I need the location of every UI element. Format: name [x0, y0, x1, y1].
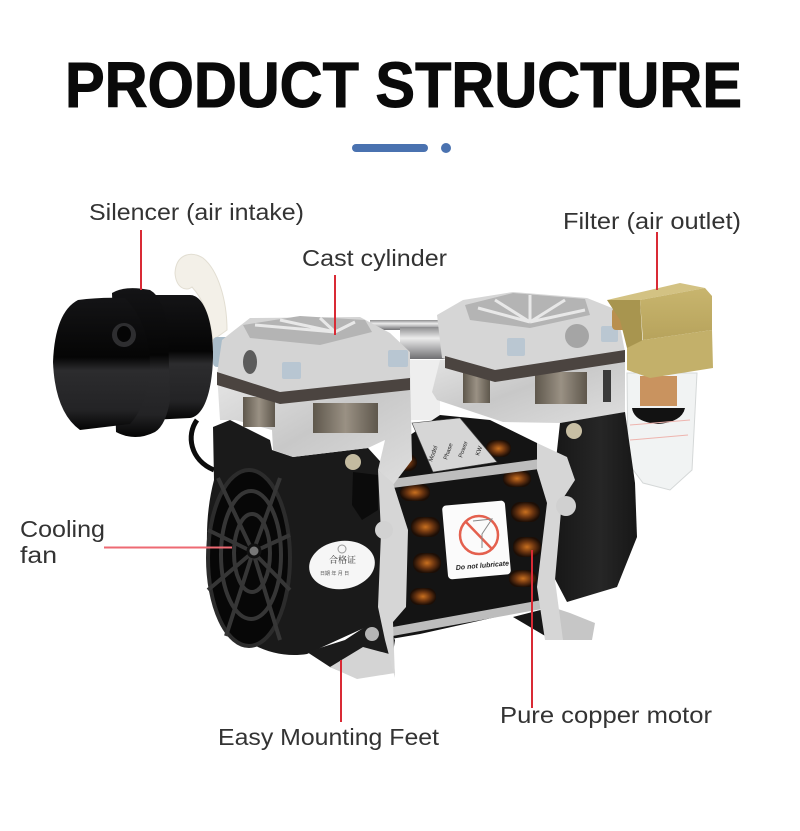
white gap behind pipe — [408, 360, 440, 420]
pump illustration — [53, 254, 713, 679]
rear foot — [513, 607, 595, 640]
right motor bracket — [537, 443, 575, 640]
silencer cap — [53, 288, 213, 437]
do not lubricate sticker: Do not lubricate — [456, 560, 509, 572]
label: cast cylinder: Cast cylinder — [302, 245, 447, 271]
label: cooling fan: Cooling — [20, 516, 105, 542]
spec plate — [412, 418, 497, 472]
motor rear black end cap — [545, 412, 637, 602]
bolt fitting — [213, 337, 237, 367]
motor body — [385, 415, 550, 640]
spec plate: Model — [428, 445, 439, 463]
spec plate: Phase — [443, 442, 455, 461]
black wire — [191, 420, 214, 470]
certificate oval: 日期 年 月 日 — [320, 570, 349, 577]
copper winding slots — [387, 440, 541, 605]
white hose — [175, 254, 227, 340]
label: pure copper motor: Pure copper motor — [500, 702, 712, 728]
right cylinder — [463, 368, 611, 404]
left motor bracket — [378, 470, 408, 678]
label: filter: Filter (air outlet) — [563, 208, 741, 234]
cast cylinder head left — [217, 316, 410, 404]
fan grille — [208, 470, 290, 646]
spec plate: Power — [458, 441, 470, 459]
left black fan housing — [207, 420, 388, 655]
do not lubricate sticker — [442, 500, 511, 580]
mounting foot — [307, 617, 395, 679]
tie rods — [365, 457, 555, 641]
label: cooling fan — [20, 516, 105, 568]
brass fitting — [612, 308, 628, 330]
tube pipes — [370, 320, 478, 359]
label: cooling fan: fan — [20, 542, 57, 568]
certificate oval: 合格证 — [329, 554, 356, 565]
certificate oval — [306, 537, 378, 593]
label: easy mounting feet: Easy Mounting Feet — [218, 724, 439, 750]
left head bracket — [217, 372, 412, 485]
callout lines — [104, 230, 657, 722]
rear bracket, right — [432, 350, 625, 423]
right cylinder head — [437, 292, 625, 382]
housing screw and latch — [345, 454, 378, 520]
filter bowl — [627, 373, 697, 490]
filter gold block — [607, 283, 713, 378]
label: silencer: Silencer (air intake) — [89, 199, 304, 225]
title accent: bar and dot — [352, 143, 451, 153]
title: PRODUCT STRUCTURE — [65, 49, 742, 121]
spec plate: KW — [475, 445, 484, 457]
